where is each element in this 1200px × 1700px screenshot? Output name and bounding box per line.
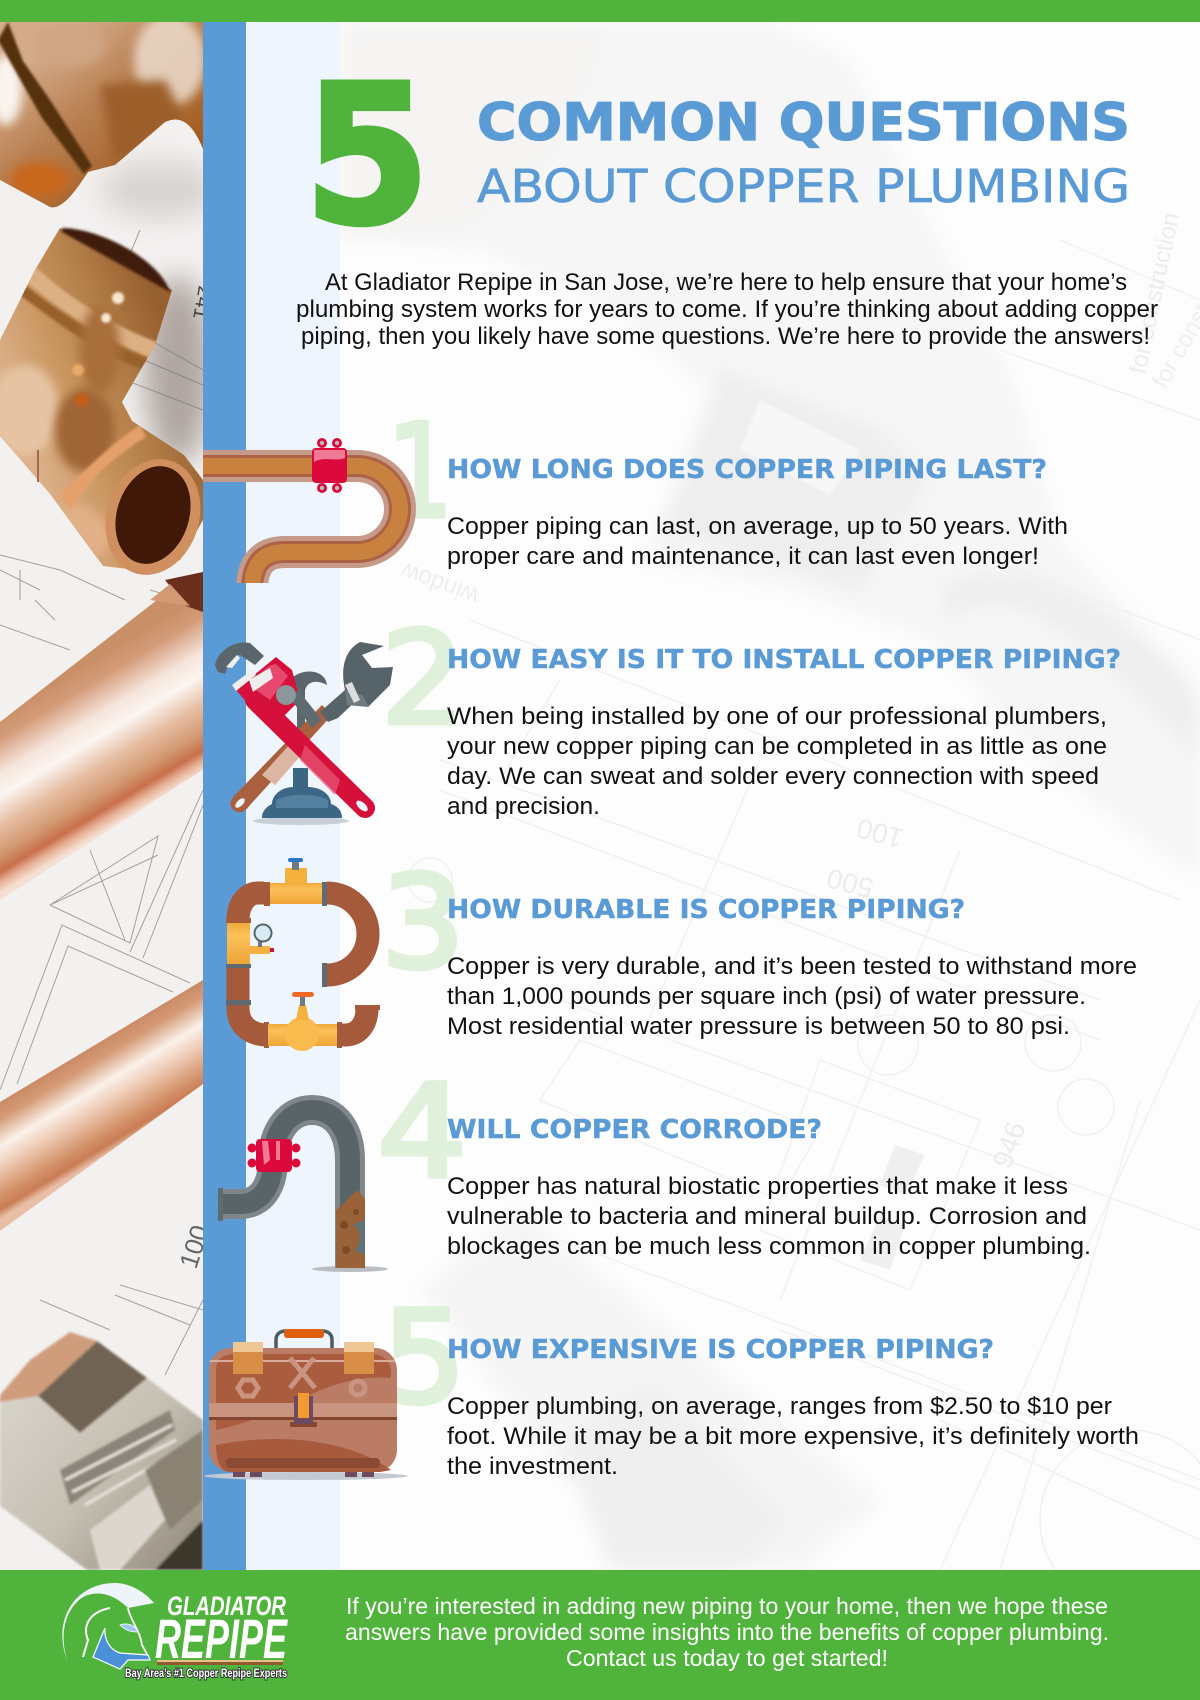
hammer	[290, 672, 327, 735]
question 5: HOW EXPENSIVE IS COPPER PIPING?	[447, 1335, 994, 1365]
pale blue band	[246, 22, 340, 1570]
question 5: the investment.	[447, 1453, 618, 1480]
watermark background: wrench and blueprint: window	[397, 557, 483, 610]
intro text	[296, 269, 1158, 350]
icon: copper pipe with clamp	[203, 438, 400, 590]
question 4: WILL COPPER CORRODE?	[447, 1115, 822, 1145]
copper pipe: large	[0, 600, 203, 900]
watermark background: wrench and blueprint: 946	[987, 1118, 1032, 1172]
watermark background: wrench and blueprint	[340, 22, 1200, 1610]
copper elbow fitting	[0, 226, 203, 575]
question 4	[447, 1115, 1091, 1260]
question 2: day. We can sweat and solder every connection with speed	[447, 763, 1099, 790]
brass nut fitting	[0, 1332, 203, 1570]
question 2: your new copper piping can be completed in as little as one	[447, 733, 1107, 760]
footer call to action	[345, 1593, 1109, 1671]
logo: Gladiator Repipe: GLADIATOR	[167, 1591, 286, 1621]
question 4: vulnerable to bacteria and mineral buildup. Corrosion and	[447, 1203, 1087, 1230]
blue vertical bar	[203, 22, 246, 1570]
footer band	[0, 1570, 1200, 1700]
watermark background: wrench and blueprint: for construction	[1124, 210, 1185, 376]
intro text: At Gladiator Repipe in San Jose, we’re here to help ensure that your home’s	[325, 269, 1127, 296]
faint numeral 2: 2	[381, 605, 465, 754]
elbow cast shadow	[144, 275, 212, 465]
question 1: HOW LONG DOES COPPER PIPING LAST?	[447, 455, 1047, 485]
logo: Gladiator Repipe	[62, 1583, 288, 1680]
left photo: copper fittings on blueprint	[0, 14, 220, 1570]
left photo: copper fittings on blueprint: 241	[188, 284, 216, 321]
question 3: Most residential water pressure is between 50 to 80 psi.	[447, 1013, 1070, 1040]
faint numeral 5: 5	[382, 1284, 466, 1433]
footer call to action: answers have provided some insights into the benefits of copper plumbing.	[345, 1619, 1109, 1645]
question 2: and precision.	[447, 793, 600, 820]
title: ABOUT COPPER PLUMBING	[477, 160, 1130, 213]
question 4: blockages can be much less common in copper plumbing.	[447, 1233, 1091, 1260]
copper pipe: small	[0, 980, 203, 1231]
question 2	[447, 645, 1121, 820]
question 5: Copper plumbing, on average, ranges from $2.50 to $10 per	[447, 1393, 1112, 1420]
icon: copper pipes with brass valves	[226, 858, 380, 1051]
logo: Gladiator Repipe: REPIPE	[155, 1607, 288, 1670]
icon: crossed wrenches and plunger	[215, 642, 393, 825]
copper fitting: top	[0, 14, 206, 212]
blueprint linework	[0, 230, 203, 1375]
faint numeral 4: 4	[377, 1058, 467, 1207]
question 3: than 1,000 pounds per square inch (psi) of water pressure.	[447, 983, 1086, 1010]
watermark background: wrench and blueprint: 100	[853, 812, 907, 854]
question 2: When being installed by one of our professional plumbers,	[447, 703, 1107, 730]
question 5: foot. While it may be a bit more expensive, it’s definitely worth	[447, 1423, 1139, 1450]
footer call to action: If you’re interested in adding new piping to your home, then we hope these	[346, 1593, 1108, 1619]
adjustable wrench	[230, 705, 332, 812]
top green bar	[0, 0, 1200, 22]
logo: Gladiator Repipe: Bay Area’s #1 Copper Repipe Experts	[125, 1668, 287, 1680]
question 3: Copper is very durable, and it’s been tested to withstand more	[447, 953, 1137, 980]
question 1	[447, 455, 1068, 570]
question 3: HOW DURABLE IS COPPER PIPING?	[447, 895, 965, 925]
footer call to action: Contact us today to get started!	[566, 1645, 888, 1671]
faint numeral 3: 3	[381, 849, 465, 998]
icon: copper toolbox	[204, 1329, 408, 1480]
question 1: Copper piping can last, on average, up to 50 years. With	[447, 513, 1068, 540]
question 5	[447, 1335, 1139, 1480]
title: COMMON QUESTIONS	[477, 93, 1130, 153]
title	[477, 93, 1130, 213]
intro text: plumbing system works for years to come. If you’re thinking about adding copper	[296, 296, 1158, 323]
watermark background: wrench and blueprint: 500	[823, 862, 877, 904]
question 1: proper care and maintenance, it can last even longer!	[447, 543, 1039, 570]
question 3	[447, 895, 1137, 1040]
faint numeral 1: 1	[387, 398, 453, 547]
icon: corroded grey pipe with clamp	[218, 1110, 388, 1272]
large green number 5: 5	[304, 45, 430, 268]
pipe wrench	[255, 700, 365, 808]
question 2: HOW EASY IS IT TO INSTALL COPPER PIPING?	[447, 645, 1121, 675]
left photo: copper fittings on blueprint: 100	[173, 1221, 215, 1272]
intro text: piping, then you likely have some questions. We’re here to provide the answers!	[301, 323, 1150, 350]
question 4: Copper has natural biostatic properties that make it less	[447, 1173, 1068, 1200]
